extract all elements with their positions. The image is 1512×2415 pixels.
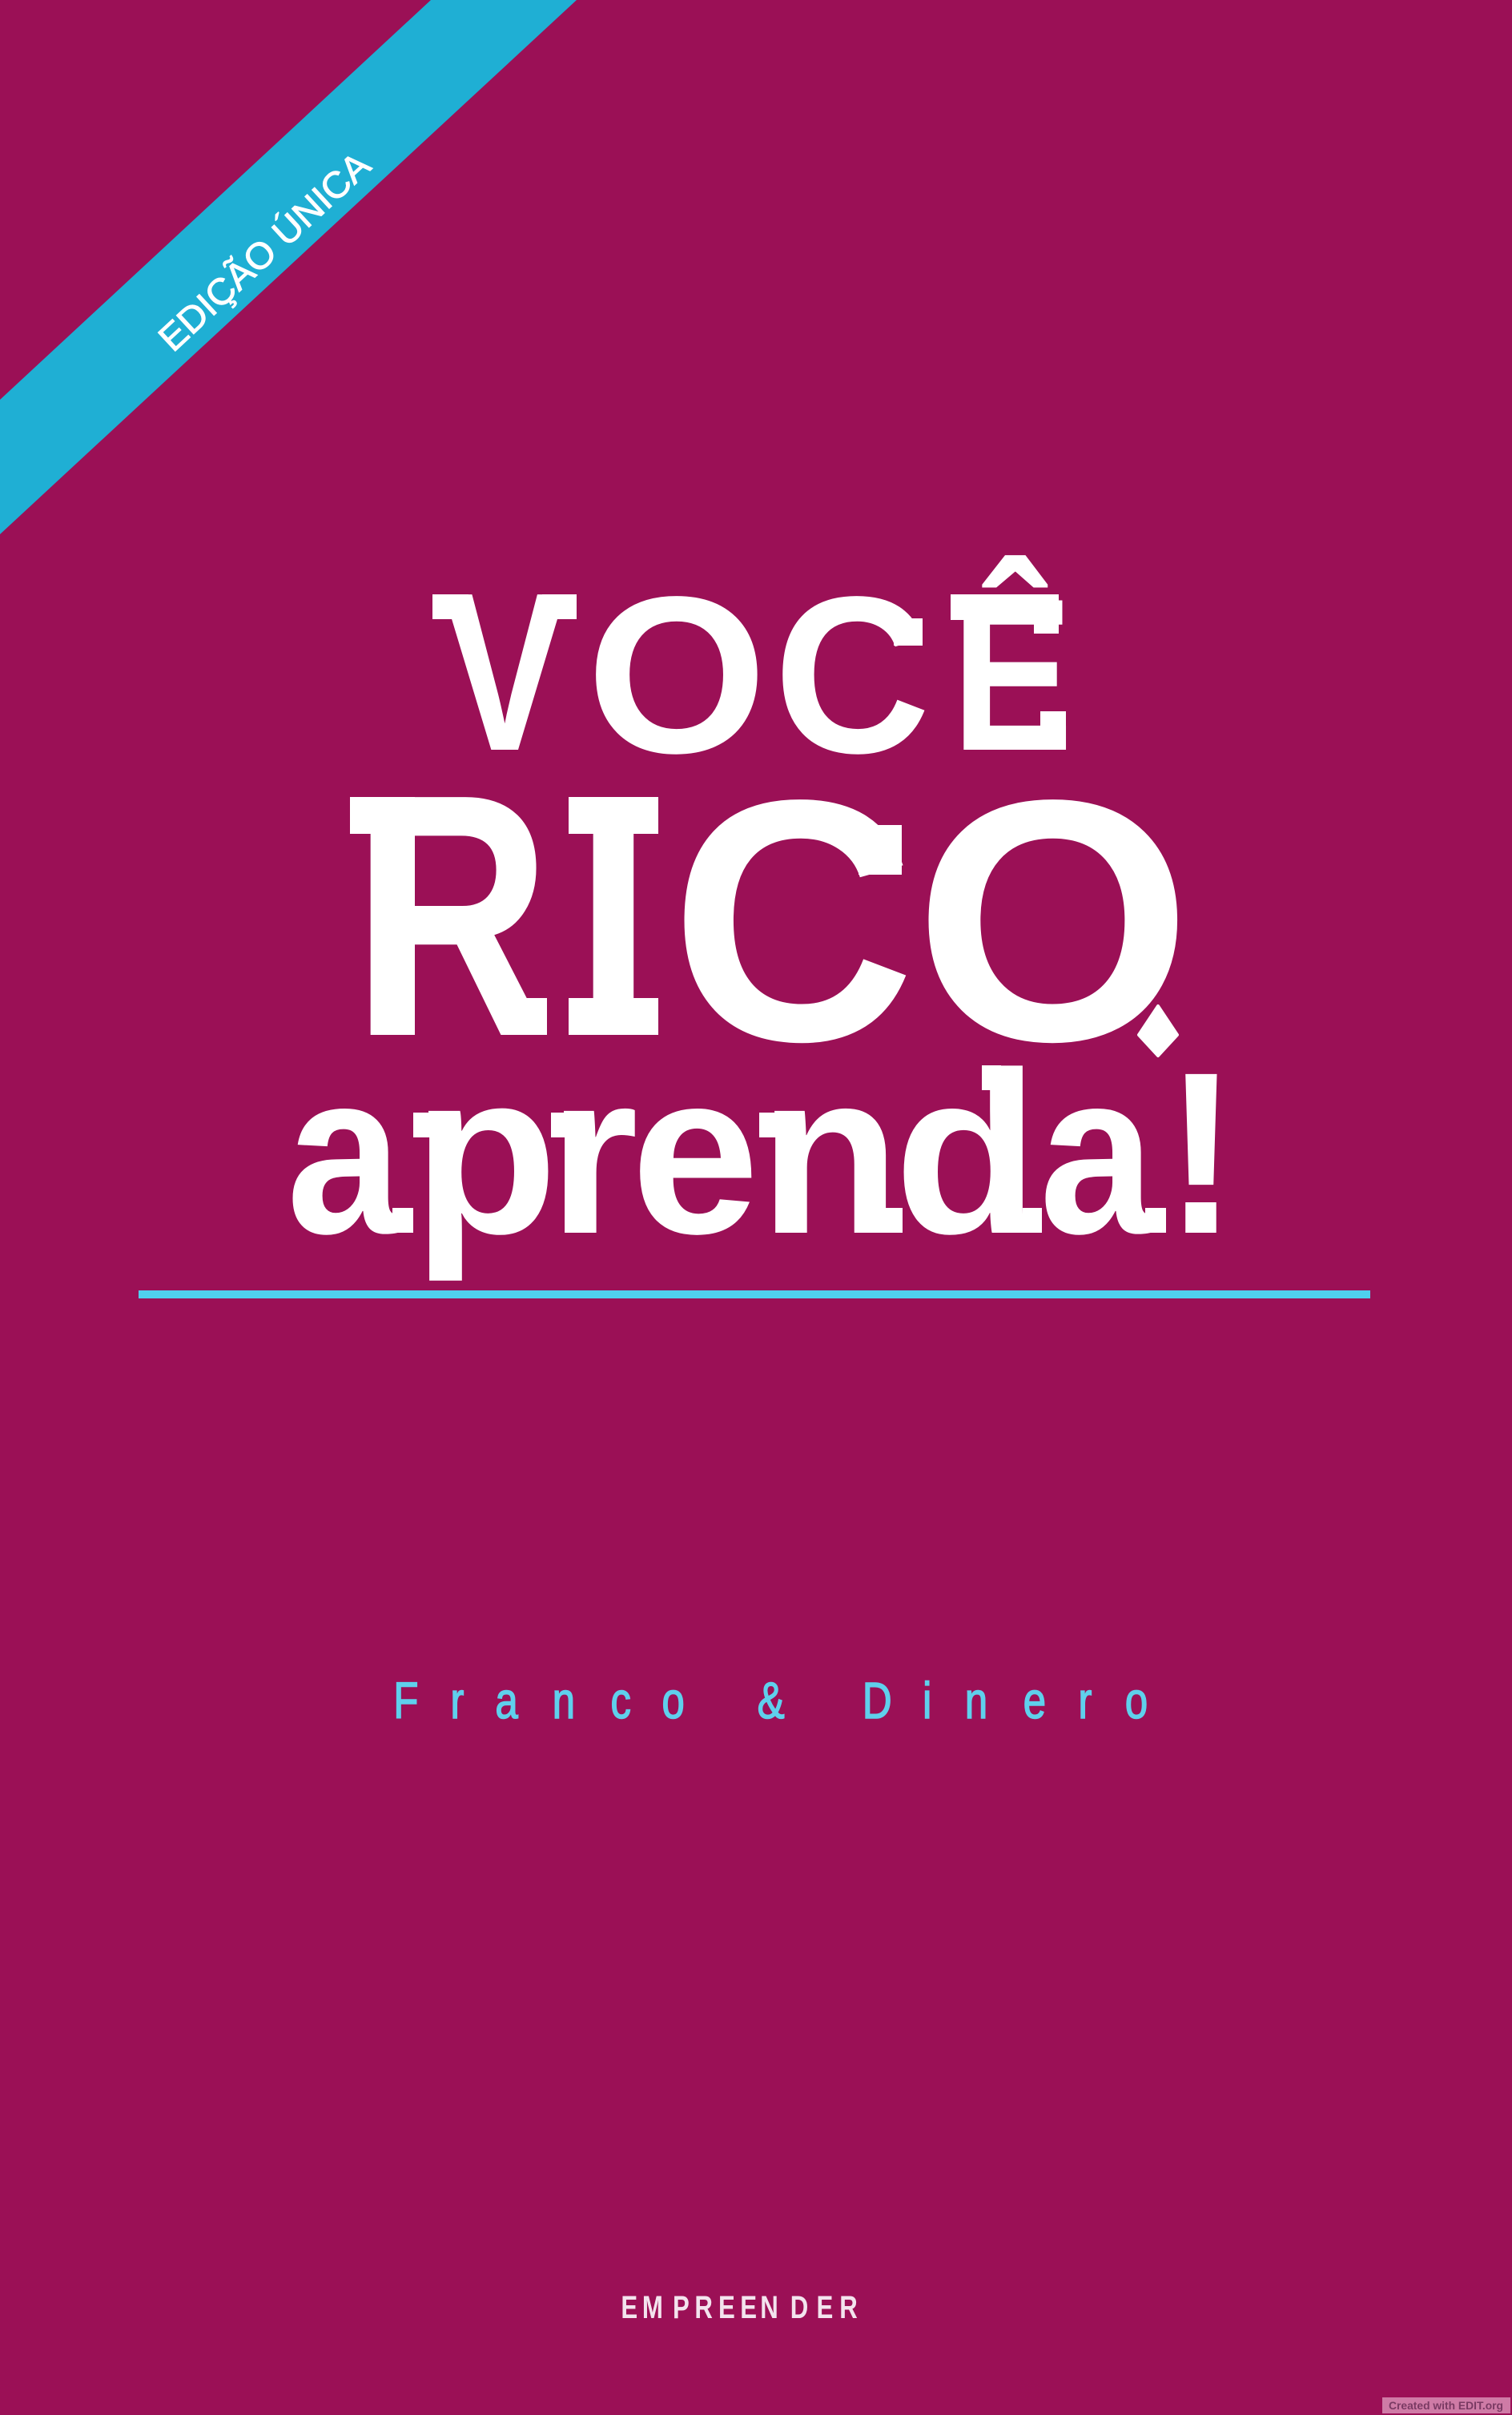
title line: aprenda!: p [412, 1024, 558, 1283]
divider line [139, 1290, 1370, 1298]
title line: aprenda!: r [549, 1024, 638, 1282]
title line: aprenda!: a [1040, 1024, 1156, 1282]
title line: VOCÊ: Ê [951, 553, 1073, 796]
ribbon label: EDIÇÃO ÚNICA [150, 143, 379, 359]
title line: RICO: O [914, 728, 1192, 1113]
title line: aprenda!: ! [1164, 1024, 1238, 1282]
title line: aprenda!: d [894, 1024, 1040, 1282]
watermark text: Created with EDIT.org [1389, 2399, 1503, 2412]
authors: Franco & Dinero [393, 1673, 1148, 1729]
title line: aprenda!: a [287, 1024, 404, 1282]
watermark badge [1382, 2397, 1510, 2413]
title line: RICO: C [670, 729, 915, 1113]
title line: VOCÊ [432, 545, 1073, 800]
title line: RICO: R [352, 722, 551, 1109]
title line: VOCÊ: O [586, 550, 767, 800]
title [287, 545, 1238, 1283]
comma mark [1139, 1006, 1177, 1056]
title line: aprenda!: n [759, 1024, 900, 1282]
corner ribbon [0, 0, 577, 534]
title line: RICO [350, 722, 1192, 1113]
title line: aprenda!: e [631, 1024, 759, 1282]
title line: aprenda! [287, 1024, 1238, 1283]
title line: VOCÊ: C [774, 550, 931, 800]
title line: VOCÊ: V [443, 545, 567, 798]
title line: RICO: I [573, 733, 653, 1113]
publisher: EMPREENDER [621, 2289, 858, 2325]
